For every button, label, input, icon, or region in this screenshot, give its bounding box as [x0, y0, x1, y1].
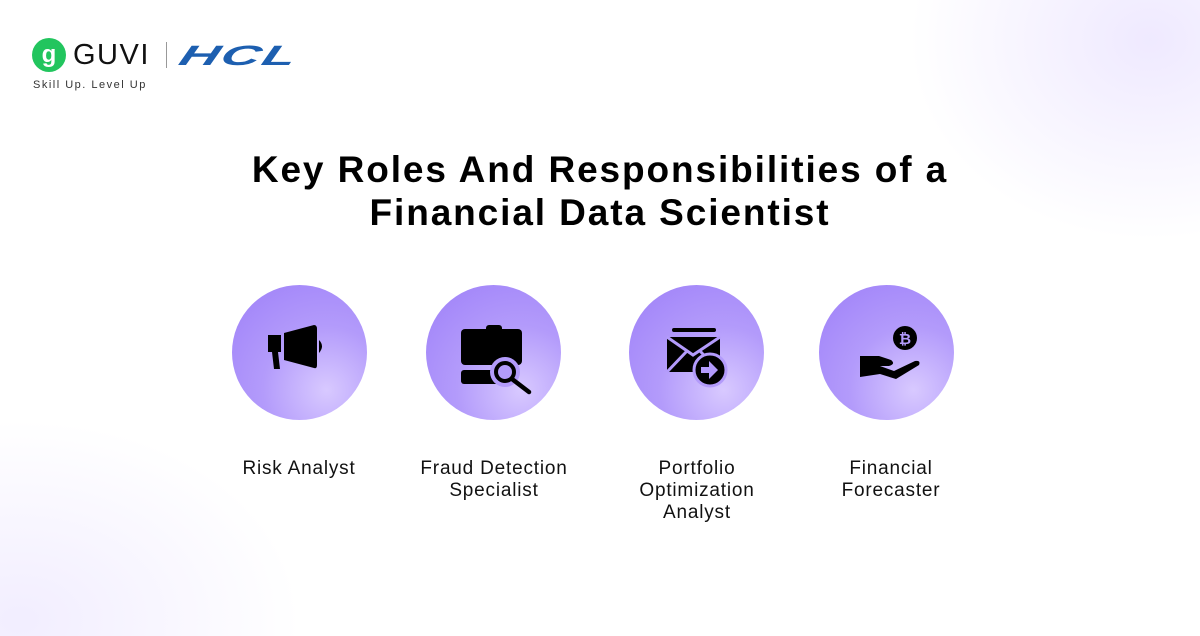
- label 2: Specialist: [449, 480, 539, 501]
- tagline: Skill Up. Level Up: [33, 79, 147, 91]
- title: Key Roles And Responsibilities of a: [252, 149, 948, 190]
- label 4: Forecaster: [842, 480, 940, 501]
- label 3: [639, 458, 755, 523]
- label 1: Risk Analyst: [242, 458, 356, 479]
- circle: hand coin: [819, 285, 954, 420]
- label 2: Fraud Detection: [420, 458, 568, 479]
- circle: mail arrow: [629, 285, 764, 420]
- title: [252, 149, 948, 233]
- circle: megaphone: [232, 285, 367, 420]
- circle: hand coin: ₿: [899, 331, 911, 348]
- label 2: [420, 458, 568, 501]
- circle: briefcase search: [426, 285, 561, 420]
- hcl text: HCL: [175, 40, 303, 71]
- icon: guvi: g: [42, 41, 56, 68]
- guvi text: GUVI: [73, 39, 150, 71]
- label 3: Portfolio: [659, 458, 735, 479]
- icon: guvi: [32, 38, 66, 72]
- label 4: Financial: [849, 458, 933, 479]
- label 3: Optimization: [639, 480, 755, 501]
- label 4: [842, 458, 940, 501]
- logo: [32, 38, 303, 91]
- title: Financial Data Scientist: [370, 192, 830, 233]
- label 3: Analyst: [663, 502, 731, 523]
